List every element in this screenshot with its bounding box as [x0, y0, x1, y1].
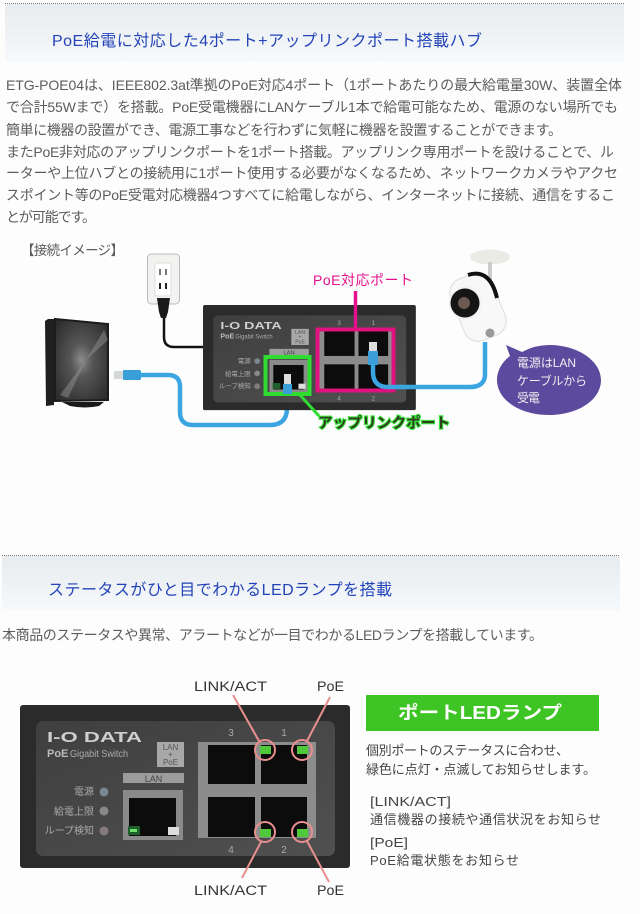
section header: LED lamps	[2, 556, 620, 611]
switch diagram: hub front panel: +	[299, 335, 302, 341]
switch photo: large front panel: 1	[281, 728, 287, 739]
text block: LED explanation: [LINK/ACT]	[370, 794, 451, 809]
text block: LED explanation: 通信機器の接続や通信状況をお知らせ	[370, 812, 601, 827]
uplink LAN cable	[114, 370, 287, 425]
callout: power via LAN bubble: ケーブルから	[517, 373, 587, 388]
callout: power via LAN bubble	[497, 345, 601, 415]
text block: LED explanation: 緑色に点灯・点滅してお知らせします。	[366, 762, 596, 777]
switch diagram: hub front panel: 給電上限	[225, 369, 251, 378]
callouts: LED port labels	[194, 679, 344, 898]
body paragraph: product description: で合計55Wまで）を搭載。PoE受電機器にLANケーブル1本で給電可能なため、電源のない場所でも	[6, 99, 618, 115]
banner: port LED lamps: ポートLEDランプ	[398, 702, 562, 723]
callout: PoE ports highlight: PoE対応ポート	[313, 272, 413, 288]
switch photo: large front panel: 2	[281, 845, 287, 856]
switch photo: large front panel: 4	[228, 845, 234, 856]
heading: LED lamps: ステータスがひと目でわかるLEDランプを搭載	[48, 581, 392, 599]
connection diagram label: 【接続イメージ】	[21, 242, 124, 258]
switch diagram: hub front panel: Gigabit Switch	[235, 334, 273, 341]
switch diagram: hub front panel: 4	[337, 395, 341, 402]
body paragraph: product description: スポイント等のPoE受電対応機器4つすべてに給電しながら、インターネットに接続、通信をするこ	[6, 187, 615, 203]
body paragraph: product description: ETG-POE04は、IEEE802.3at準拠のPoE対応4ポート（1ポートあたりの最大給電量30W、装置全体	[6, 77, 622, 93]
icon: network camera	[445, 250, 511, 346]
PoE LAN cable to camera	[368, 342, 485, 387]
switch diagram: hub front panel: LAN	[295, 330, 305, 336]
switch photo: large front panel: PoE	[47, 748, 68, 760]
text block: LED explanation: PoE給電状態をお知らせ	[370, 853, 519, 868]
icon: router	[45, 319, 108, 408]
switch diagram: hub front panel: 1	[371, 320, 375, 327]
heading: PoE hub: PoE給電に対応した4ポート+アップリンクポート搭載ハブ	[52, 31, 482, 50]
switch photo: large front panel: ループ検知	[45, 824, 94, 837]
callouts: LED port labels: PoE	[317, 679, 344, 694]
body paragraph: product description	[6, 77, 622, 225]
body text: LED description: 本商品のステータスや異常、アラートなどが一目でわかるLEDランプを搭載しています。	[2, 627, 543, 643]
icon: wall outlet and power plug	[148, 254, 204, 347]
callouts: LED port labels: LINK/ACT	[194, 883, 267, 898]
callout: PoE ports highlight	[313, 272, 413, 390]
callout: power via LAN bubble: 電源はLAN	[517, 356, 576, 370]
switch photo: large front panel: +	[168, 750, 173, 759]
switch diagram: hub front panel: LAN	[283, 351, 295, 357]
switch diagram: hub front panel: 電源	[238, 356, 251, 365]
switch photo: large front panel: 電源	[74, 785, 94, 798]
switch photo: large front panel: I-O DATA	[47, 729, 142, 746]
switch diagram: hub front panel: 3	[337, 320, 341, 327]
text block: LED explanation: [PoE]	[370, 835, 408, 850]
switch diagram: hub front panel	[203, 305, 416, 410]
switch diagram: hub front panel: I-O DATA	[220, 321, 282, 332]
banner: port LED lamps	[366, 695, 599, 731]
switch photo: large front panel: LAN	[163, 743, 179, 752]
body paragraph: product description: とが可能です。	[6, 209, 96, 225]
text block: LED explanation	[366, 743, 601, 868]
body paragraph: product description: 簡単に機器の設置ができ、電源工事などを行わずに気軽に機器を設置することができます。	[6, 122, 562, 138]
callout: power via LAN bubble: 受電	[517, 391, 540, 405]
switch photo: large front panel	[20, 705, 350, 868]
switch diagram: hub front panel: 2	[371, 395, 375, 402]
callouts: LED port labels: LINK/ACT	[194, 679, 267, 694]
switch photo: large front panel: LAN	[145, 774, 162, 784]
text block: LED explanation: 個別ポートのステータスに合わせ、	[366, 743, 569, 758]
callout: uplink port highlight	[266, 357, 450, 432]
body paragraph: product description: またPoE非対応のアップリンクポートを1ポート搭載。アップリンク専用ポートを設けることで、ル	[6, 144, 614, 160]
switch diagram: hub front panel: PoE	[220, 333, 234, 341]
switch photo: large front panel: 給電上限	[54, 805, 94, 818]
switch photo: large front panel: 3	[228, 728, 234, 739]
section header: PoE hub	[5, 4, 624, 62]
label: uplink port: アップリンクポート	[318, 415, 450, 432]
body paragraph: product description: ーターや上位ハブとの接続用に1ポート使用する必要がなくなるため、ネットワークカメラやアクセ	[6, 165, 618, 181]
switch photo: large front panel: Gigabit Switch	[70, 749, 128, 760]
switch diagram: hub front panel: PoE	[295, 340, 306, 346]
switch diagram: hub front panel: ループ検知	[219, 381, 251, 390]
switch photo: large front panel: PoE	[163, 758, 178, 767]
callouts: LED port labels: PoE	[317, 883, 344, 898]
